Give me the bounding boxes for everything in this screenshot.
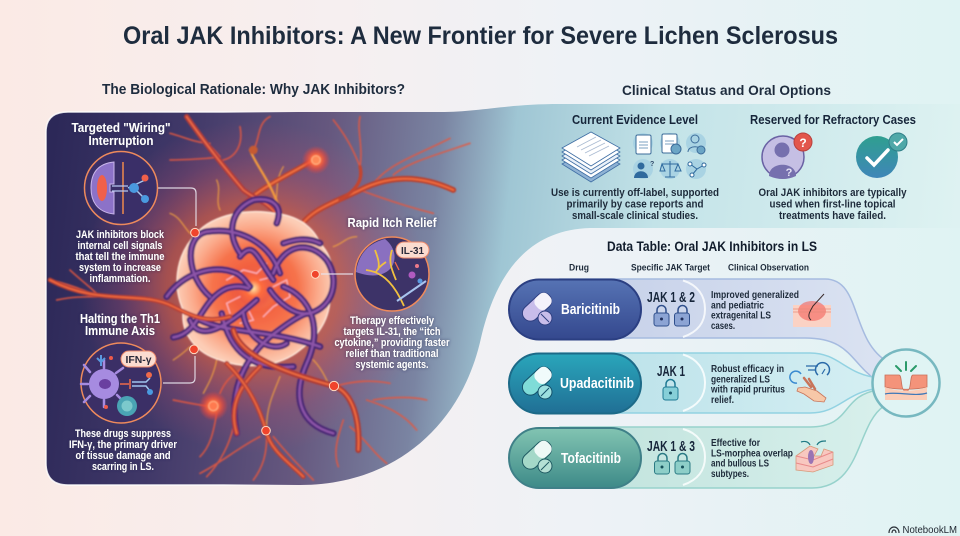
text: evidence description: Use is currently off-label, supported [551,187,719,199]
band [560,390,884,488]
target column crescent [683,280,705,337]
icon: inflamed hair follicle [793,294,831,327]
text: itch description: Therapy effectively [350,315,434,327]
neuron node top right [302,146,330,174]
text: Th1 description: scarring in LS. [92,461,154,473]
text: refractory description: used when first-line topical [770,198,896,210]
table column headers: Clinical Observation [728,262,809,272]
panel: reserved for refractory cases [750,112,916,222]
yellow nerve branches [170,167,357,427]
heading: Th1 axis: Immune Axis [85,324,155,338]
icon: patient question: ? [799,136,807,150]
text: Th1 description [69,428,177,473]
pill label [509,280,641,340]
target: JAK 1 & 3 [647,439,695,474]
cell core highlight [230,265,277,312]
pill label [509,428,641,488]
observation text: Improved generalized [711,290,799,301]
observation text: and bullous LS [711,458,769,470]
target column crescent [683,354,705,411]
text: Th1 description: IFN-γ, the primary driver [69,439,177,451]
pill label: Upadacitinib [560,375,634,392]
icon: person check [686,133,706,154]
target: JAK 1: JAK 1 [657,364,685,380]
text: itch description: cytokine,” providing faster [334,337,450,349]
illustration: inflamed cell and nerve network [50,117,470,480]
target: JAK 1 [657,364,685,400]
text: itch description: systemic agents. [356,359,429,371]
neuron node small top [249,146,258,154]
text: refractory description: Oral JAK inhibitors are typically [758,187,907,199]
heading: targeted wiring [72,121,171,148]
pink core filaments [220,263,290,323]
text: evidence description [551,187,719,222]
observation text: Effective for [711,438,760,449]
text: itch description: relief than traditional [346,348,439,360]
heading: rapid itch relief: Rapid Itch Relief [348,216,437,230]
pill label: Baricitinib [561,301,620,318]
observation text: subtypes. [711,469,749,480]
heading: targeted wiring: Interruption [88,134,154,148]
table row: Tofacitinib [509,390,884,488]
heading: clinical status: Clinical Status and Oral Options [622,83,831,99]
icon: document check [660,133,681,154]
heading: evidence: Current Evidence Level [572,112,698,127]
panel: current evidence level [551,112,719,222]
observation text: relief. [711,395,734,406]
table column headers: Drug [569,262,589,272]
observation text [710,364,785,406]
icon: healed skin hub [872,350,940,416]
heading: biological rationale: The Biological Rationale: Why JAK Inhibitors? [102,82,405,98]
target: JAK 1 & 2: JAK 1 & 2 [647,290,695,306]
thin red nerve branches [50,117,470,480]
icon: scratching hand with speed gauge [790,363,830,402]
purple vessels wrapping cell [167,199,333,433]
label: IL-31: IL-31 [401,246,424,257]
red vessels in front of cell [50,280,359,477]
table row: Baricitinib [509,279,888,380]
observation text [711,290,799,332]
icon: scales [660,159,681,179]
title: Oral JAK Inhibitors: A New Frontier for Severe Lichen Sclerosus [123,23,838,50]
heading: refractory: Reserved for Refractory Cases [750,112,916,127]
text: Th1 description: of tissue damage and [76,450,170,462]
target: JAK 1 & 2 [647,290,695,326]
icon: immune cell and IFN-gamma [81,343,161,423]
target: JAK 1 & 3: JAK 1 & 3 [647,439,695,455]
label: IFN-gamma: IFN-γ [126,355,152,366]
text: targeted wiring description: JAK inhibitors block [76,229,164,241]
icon: molecule [686,159,706,179]
pill label [509,354,641,414]
text: targeted wiring description: internal cell signals [78,240,163,252]
table row: Upadacitinib [509,353,880,414]
icon: approved check [856,133,907,178]
text: targeted wiring description: inflammation. [90,273,151,285]
text: targeted wiring description: system to increase [79,262,161,274]
observation text: Robust efficacy in [711,364,784,375]
icon: document [633,133,653,154]
observation text: LS-morphea overlap [711,448,793,460]
icon: paper stack [562,132,620,182]
heading: Th1 axis [80,312,160,338]
text: refractory description [758,187,907,222]
target column crescent [683,429,705,485]
icon: receptor blockade [84,152,158,224]
text: targeted wiring description [76,229,165,285]
band [560,353,880,413]
text: evidence description: primarily by case reports and [566,198,704,210]
table column headers: Specific JAK Target [631,262,710,272]
neuron node bottom left [199,391,228,421]
heading: targeted wiring: Targeted "Wiring" [72,121,171,135]
central glow [80,120,427,453]
heading: data table: Data Table: Oral JAK Inhibitors in LS [607,238,817,254]
band [560,279,888,380]
pill label: Tofacitinib [561,450,621,467]
observation text: extragenital LS [711,310,771,322]
text: evidence description: small-scale clinical studies. [572,210,698,222]
text: Th1 description: These drugs suppress [75,428,171,440]
callout: halting Th1 axis [69,312,177,473]
callout: rapid itch relief [334,216,450,371]
icon: skin block with arrows [796,441,833,472]
text: itch description: targets IL-31, the “itch [344,326,440,338]
text: itch description [334,315,450,371]
panel: biological rationale background band [46,104,960,485]
icon: person question: ? [650,161,654,168]
observation text: generalized LS [711,374,770,386]
observation text [711,438,793,480]
text: refractory description: treatments have failed. [779,210,886,222]
panel rim on left [46,112,298,485]
icon: person question [633,159,654,179]
observation text: with rapid pruritus [710,384,785,396]
heading: Th1 axis: Halting the Th1 [80,312,160,326]
brand: NotebookLM: NotebookLM [902,525,957,536]
text: targeted wiring description: that tell the immune [76,251,165,263]
red marker dots [190,228,339,435]
observation text: and pediatric [711,300,764,312]
icon: itch nerve and IL-31 [355,237,429,311]
connector lines [158,188,353,383]
table column headers [569,262,809,272]
softened vessel network [50,117,470,480]
icon: patient question: ? [786,167,793,179]
icon: patient question [762,133,812,179]
cell body [177,212,333,366]
callout: targeted wiring interruption [72,121,171,285]
thick red vessels behind cell [187,117,453,233]
observation text: cases. [711,321,735,332]
